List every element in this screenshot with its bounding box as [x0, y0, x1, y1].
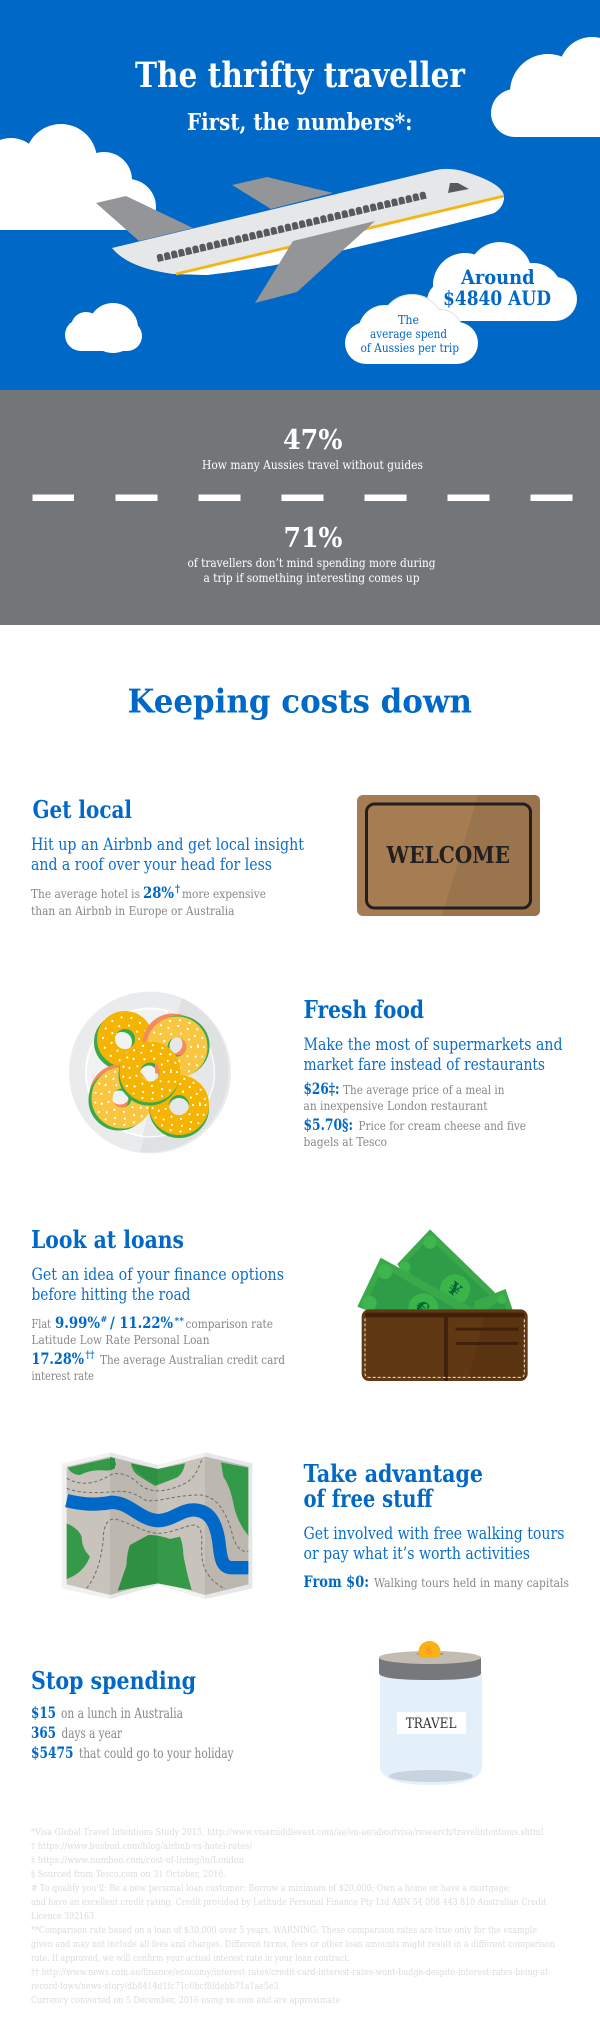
section: look at loans: before hitting the road [32, 1285, 191, 1304]
section: look at loans: 17.28% [32, 1349, 84, 1368]
road dashes [32, 494, 572, 501]
banknote: back yen [397, 1229, 510, 1315]
section: look at loans: Look at loans [31, 1225, 184, 1254]
icon: travel savings jar [379, 1641, 482, 1785]
section: free stuff: or pay what it’s worth activities [304, 1544, 530, 1563]
wallet body [362, 1309, 528, 1381]
callout: small cloud: of Aussies per trip [360, 340, 459, 355]
section: look at loans: Flat [32, 1316, 51, 1331]
callout: big cloud: $4840 AUD [443, 286, 551, 310]
section: look at loans: ** [174, 1317, 184, 1327]
section: get local: than an Airbnb in Europe or Australia [31, 903, 235, 918]
banknote: front euro: € [410, 1296, 433, 1320]
cloud: top right [491, 37, 600, 137]
banknote: back yen: ¥ [443, 1278, 465, 1301]
map: dashed trails [67, 1460, 248, 1589]
footnotes: † https://www.busbud.com/blog/airbnb-vs-hotel-rates/ [31, 1841, 253, 1852]
callout: small cloud: average spend [370, 326, 447, 341]
stat: 71%: of travellers don’t mind spending more during [188, 555, 436, 570]
banknote: right [472, 1289, 514, 1315]
stat: 71%: a trip if something interesting comes up [204, 570, 420, 585]
section: look at loans: # [100, 1314, 108, 1324]
bagel: top left [103, 1017, 147, 1061]
section: fresh food: $26‡: [304, 1079, 340, 1098]
icon: airplane [96, 169, 504, 303]
section: look at loans: †† [86, 1350, 94, 1361]
section: free stuff: From $0: [304, 1572, 369, 1591]
map: river [67, 1501, 248, 1568]
section: get local: 28% [143, 883, 174, 902]
section: get local: and a roof over your head for less [31, 855, 272, 874]
section: stop spending: that could go to your holiday [79, 1746, 234, 1762]
bagel: top right [150, 1020, 204, 1074]
footnotes: rate. If approved, we will confirm your actual interest rate in your loan contract. [31, 1953, 350, 1964]
section: look at loans: Latitude Low Rate Personal Loan [32, 1332, 210, 1347]
footnotes: Licence 392163 [31, 1911, 94, 1922]
section: fresh food: Fresh food [304, 995, 424, 1024]
section: look at loans [31, 1225, 285, 1383]
section: stop spending [31, 1666, 234, 1762]
section: stop spending: $15 [31, 1703, 56, 1722]
icon: folded map [62, 1452, 252, 1599]
section: fresh food: bagels at Tesco [304, 1134, 387, 1149]
section: look at loans: comparison rate [186, 1316, 273, 1331]
stat: 71% [188, 523, 436, 585]
section: free stuff: Walking tours held in many capitals [374, 1575, 569, 1590]
section: free stuff [304, 1459, 569, 1591]
section: free stuff: Get involved with free walking tours [304, 1524, 564, 1543]
section: fresh food: Price for cream cheese and five [358, 1118, 526, 1133]
icon: welcome mat [357, 795, 540, 916]
section: stop spending: on a lunch in Australia [61, 1706, 183, 1722]
section: look at loans: 9.99% [55, 1313, 100, 1332]
section: get local: The average hotel is [31, 886, 140, 901]
section: stop spending: 365 [31, 1723, 56, 1742]
section: get local [31, 795, 304, 918]
section: fresh food: an inexpensive London restaurant [304, 1098, 488, 1113]
icon: welcome mat: WELCOME [386, 842, 510, 869]
bagel: bottom right [152, 1078, 206, 1132]
callout: big cloud [427, 242, 577, 321]
callout: small cloud [345, 295, 478, 364]
section: free stuff: of free stuff [304, 1484, 434, 1513]
footnotes: ‡ https://www.numbeo.com/cost-of-living/in/London [31, 1855, 244, 1866]
cloud: small left [65, 303, 142, 353]
icon: travel savings jar: $ [426, 1646, 432, 1657]
subtitle: First, the numbers*: [187, 109, 412, 136]
cloud: left [0, 124, 156, 235]
map: green areas [67, 1458, 248, 1591]
callout: small cloud: The [398, 312, 419, 327]
footnotes: § Sourced from Tesco.com on 31 October, 2016. [31, 1869, 226, 1880]
panel: stats road [0, 390, 600, 625]
bagel: bottom left [95, 1071, 149, 1125]
section: look at loans: Get an idea of your finance options [32, 1265, 284, 1284]
section: fresh food: The average price of a meal in [343, 1082, 504, 1097]
section: stop spending: Stop spending [31, 1666, 196, 1695]
icon: plate of bagels [69, 992, 231, 1154]
section: get local: more expensive [182, 886, 266, 901]
footnotes: record-lows/news-story/db8414d1fc71c6bcf8fdebb71a1ae5e3 [31, 1981, 279, 1992]
section: get local: Hit up an Airbnb and get local insight [31, 835, 304, 854]
bagel: centre [123, 1045, 177, 1099]
banknote: front euro [357, 1258, 485, 1323]
panel: hero sky [0, 0, 600, 390]
stat: 71%: 71% [284, 523, 342, 554]
title: The thrifty traveller [135, 55, 465, 96]
callout: big cloud: Around [460, 265, 535, 289]
section: fresh food: market fare instead of restaurants [304, 1055, 545, 1074]
section: fresh food [304, 995, 563, 1149]
heading: keeping costs down: Keeping costs down [128, 682, 472, 720]
section: stop spending: days a year [62, 1726, 122, 1742]
stat: 47%: 47% [283, 425, 342, 456]
footnotes: # To qualify you’ll: Be a new personal loan customer; Borrow a minimum of $20,000; Own a home or have a mortgage; [31, 1883, 511, 1894]
icon: travel savings jar: TRAVEL [406, 1716, 457, 1732]
icon: wallet with banknotes [357, 1229, 528, 1381]
footnotes: Currency converted on 5 December, 2016 using xe.com and are approximate [31, 1995, 340, 2006]
section: free stuff: Take advantage [304, 1459, 483, 1488]
section: fresh food: $5.70§: [304, 1115, 353, 1134]
section: get local: † [175, 884, 180, 895]
section: stop spending: $5475 [31, 1743, 74, 1762]
section: look at loans: The average Australian credit card [100, 1352, 285, 1367]
section: look at loans: / 11.22% [110, 1313, 173, 1332]
section: get local: Get local [32, 795, 132, 824]
stat: 47%: How many Aussies travel without guides [202, 457, 423, 472]
section: look at loans: interest rate [32, 1368, 94, 1383]
section: fresh food: Make the most of supermarkets and [304, 1035, 563, 1054]
stat: 47% [202, 425, 423, 472]
footnotes [31, 1827, 555, 2006]
